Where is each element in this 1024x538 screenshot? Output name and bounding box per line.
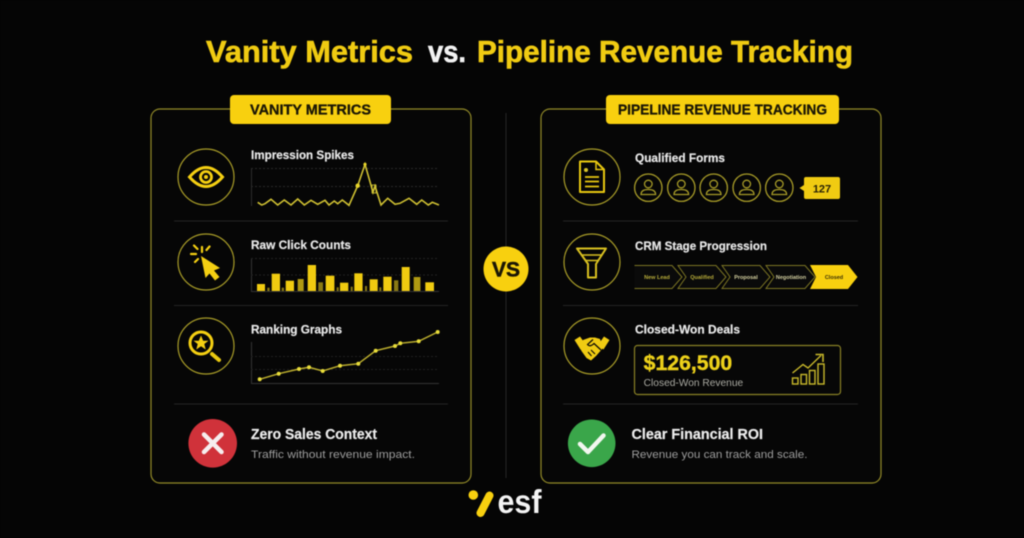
chart: crm stage chevrons: Negotiation xyxy=(776,275,807,281)
icons: people row xyxy=(635,174,793,201)
callout: clear financial roi: Revenue you can track and scale. xyxy=(632,449,808,461)
chart: crm stage chevrons xyxy=(634,265,858,289)
badge: pipeline revenue tracking: PIPELINE REVENUE TRACKING xyxy=(618,102,827,118)
callout: zero sales context: Traffic without revenue impact. xyxy=(251,449,415,461)
card: closed-won revenue xyxy=(634,346,840,394)
badge: vanity metrics: VANITY METRICS xyxy=(250,102,371,118)
icon: handshake xyxy=(564,318,620,374)
callout: clear financial roi: Clear Financial ROI xyxy=(632,427,763,443)
badge: 127 xyxy=(800,177,840,199)
vs badge: VS xyxy=(492,258,520,282)
chart: ranking line xyxy=(251,330,440,384)
title: vs. xyxy=(428,34,466,69)
callout: clear financial roi xyxy=(632,427,808,461)
icon: growth chart xyxy=(792,354,824,384)
badge: pipeline revenue tracking xyxy=(606,95,839,124)
heading: qualified forms: Qualified Forms xyxy=(635,151,725,165)
chart: crm stage chevrons: Qualified xyxy=(690,275,714,281)
badge: 127: 127 xyxy=(813,184,831,196)
panel: vanity metrics xyxy=(151,95,471,483)
logo: esf xyxy=(468,483,542,520)
callout: zero sales context: Zero Sales Context xyxy=(251,427,377,443)
badge: vanity metrics xyxy=(230,95,391,124)
panel: pipeline revenue tracking xyxy=(541,95,881,483)
vs badge xyxy=(484,246,528,292)
logo: esf: esf xyxy=(498,483,542,520)
title: Vanity Metrics xyxy=(206,34,413,69)
chart: raw click counts bars xyxy=(251,258,439,292)
chart: crm stage chevrons: Closed xyxy=(825,275,843,281)
heading: ranking graphs: Ranking Graphs xyxy=(251,322,342,336)
heading: raw click counts: Raw Click Counts xyxy=(251,238,351,252)
card: closed-won revenue: Closed-Won Revenue xyxy=(644,378,744,389)
icon: click cursor xyxy=(178,234,234,290)
icon: green check xyxy=(568,420,616,467)
chart: crm stage chevrons: New Lead xyxy=(644,275,670,281)
icon: funnel xyxy=(564,234,620,290)
title: Pipeline Revenue Tracking xyxy=(477,34,853,69)
card: closed-won revenue: $126,500 xyxy=(644,352,732,375)
heading: closed-won deals: Closed-Won Deals xyxy=(635,322,740,336)
icon: document xyxy=(564,149,620,205)
chart: crm stage chevrons: Proposal xyxy=(734,275,758,281)
title xyxy=(206,34,853,69)
icon: eye xyxy=(178,149,234,205)
chart: impression spikes line xyxy=(251,163,439,206)
heading: crm stage progression: CRM Stage Progression xyxy=(635,239,767,253)
icon: red cross xyxy=(188,419,237,468)
icon: magnifier with star xyxy=(178,318,234,374)
callout: zero sales context xyxy=(251,427,415,461)
heading: impression spikes: Impression Spikes xyxy=(251,148,354,162)
